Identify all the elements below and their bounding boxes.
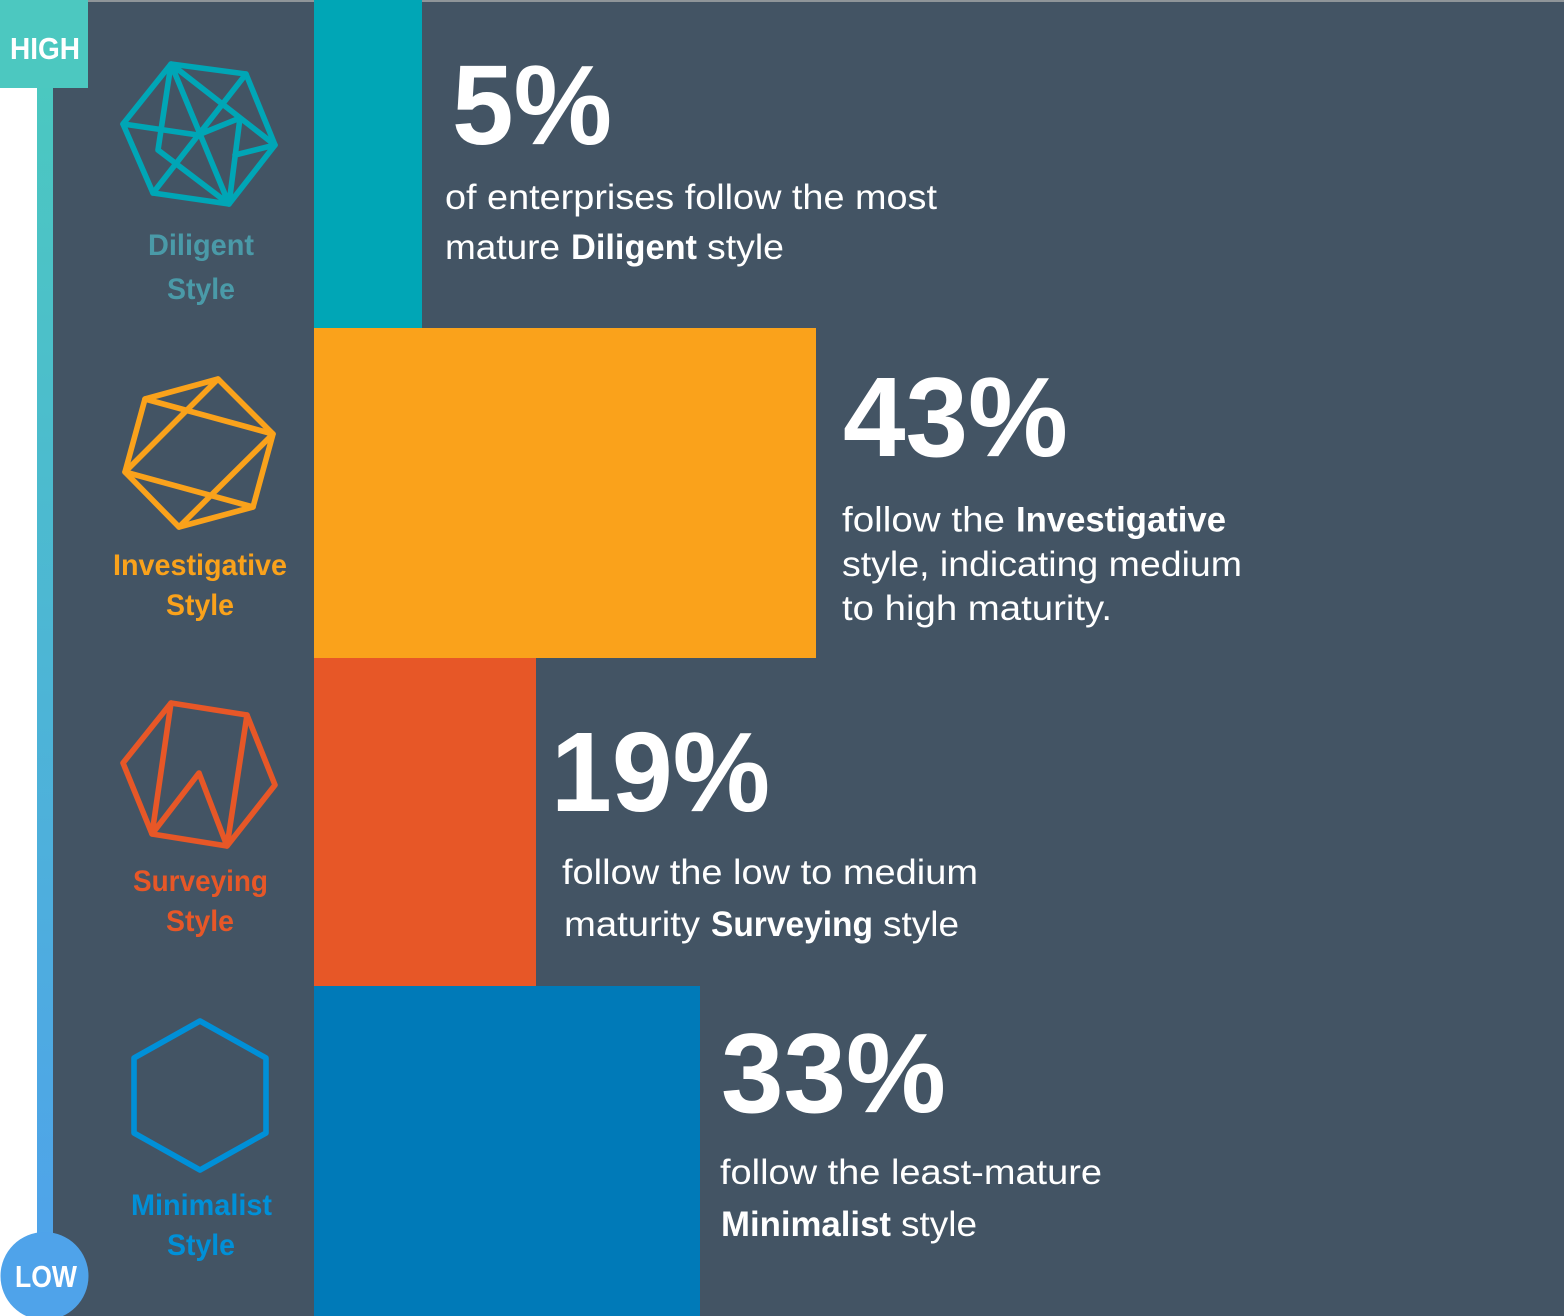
bar: Diligent 5%: [314, 0, 422, 328]
maturity scale: [0, 0, 88, 1316]
text: Investigative description: Investigative: [1016, 500, 1226, 540]
stat: 19%: 19%: [551, 709, 770, 835]
text: Diligent description: of enterprises follow the most: [445, 178, 937, 217]
panel: Diligent style: [123, 0, 937, 328]
label: Investigative Style: Style: [166, 589, 234, 622]
icon: Minimalist hexagon: [134, 1021, 266, 1170]
panel: Surveying style: [123, 658, 978, 986]
text: Minimalist description: follow the least-mature: [720, 1153, 1102, 1192]
text: Minimalist description: style: [901, 1205, 977, 1244]
label: Investigative Style: Investigative: [113, 549, 287, 582]
label: Minimalist Style: [131, 1189, 272, 1262]
label: Surveying Style: Style: [166, 905, 234, 938]
panel: Investigative style: [113, 328, 1242, 658]
text: Diligent description: Diligent: [571, 228, 697, 267]
label: Diligent Style: [148, 229, 254, 306]
text: Surveying description: [562, 853, 978, 944]
panel: Minimalist style: [131, 986, 1102, 1316]
text: Diligent description: [445, 178, 937, 267]
text: Investigative description: to high maturity.: [842, 589, 1112, 628]
text: Diligent description: style: [707, 228, 784, 267]
stat: 43%: 43%: [843, 354, 1068, 480]
bar: Surveying 19%: [314, 658, 536, 986]
text: Minimalist description: [720, 1153, 1102, 1244]
text: Diligent description: mature: [445, 228, 560, 267]
bar: Minimalist 33%: [314, 986, 700, 1316]
text: Surveying description: follow the low to medium: [562, 853, 978, 892]
icon: Diligent polyhedron: [123, 64, 275, 204]
bar: Investigative 43%: [314, 328, 816, 658]
text: Surveying description: Surveying: [711, 905, 873, 944]
icon: Investigative polyhedron: [125, 379, 273, 527]
icon: Surveying polyhedron: [123, 703, 275, 846]
text: Investigative description: follow the: [842, 500, 1005, 540]
label: Diligent Style: Diligent: [148, 229, 254, 262]
stat: 5%: 5%: [452, 42, 612, 168]
label: Minimalist Style: Minimalist: [131, 1189, 272, 1222]
text: Investigative description: style, indicating medium: [842, 545, 1242, 584]
label: Investigative Style: [113, 549, 287, 622]
text: Surveying description: maturity: [564, 905, 701, 944]
label: Surveying Style: [133, 865, 268, 938]
label: Diligent Style: Style: [167, 273, 235, 306]
scale bottom: LOW: LOW: [15, 1259, 78, 1294]
scale top: HIGH: HIGH: [10, 31, 80, 66]
text: Investigative description: [842, 500, 1242, 628]
scale top: HIGH: [0, 0, 88, 88]
text: Minimalist description: Minimalist: [721, 1205, 891, 1244]
scale bottom: LOW: [0, 1232, 88, 1316]
text: Surveying description: style: [883, 905, 959, 944]
stat: 33%: 33%: [721, 1010, 946, 1136]
label: Surveying Style: Surveying: [133, 865, 268, 898]
label: Minimalist Style: Style: [167, 1229, 235, 1262]
